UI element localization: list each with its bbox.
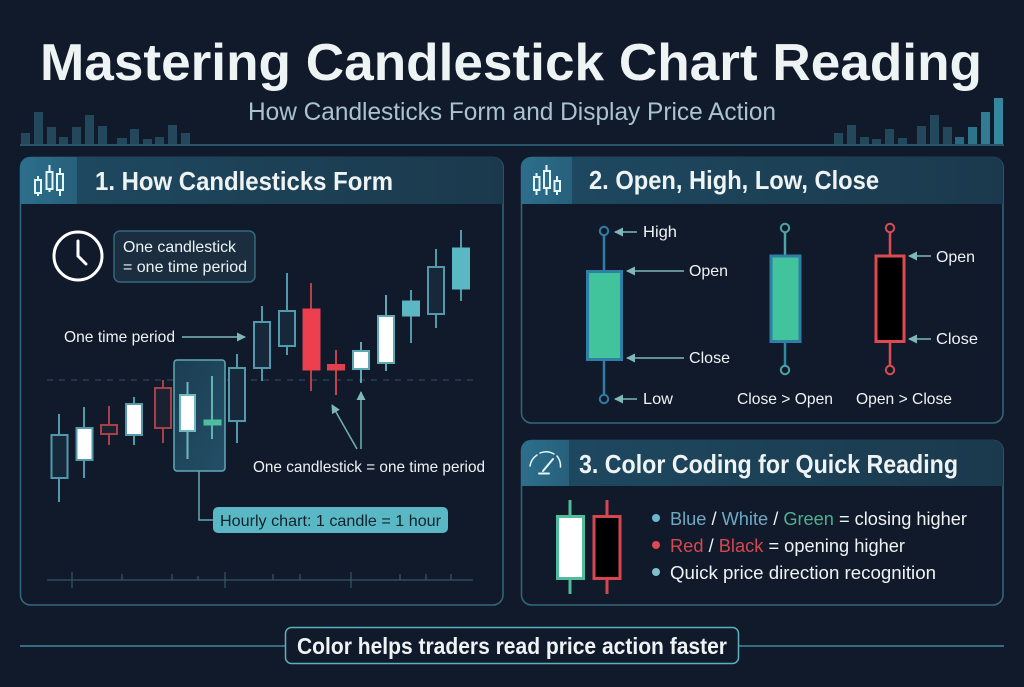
icon: speedometer bbox=[521, 440, 569, 486]
OHLC labels bbox=[615, 224, 730, 408]
candlestick chart bbox=[52, 230, 469, 502]
callout: one candlestick: One candlestick bbox=[123, 239, 237, 256]
OHLC labels: High bbox=[643, 224, 677, 241]
footer banner: Color helps traders read price action faster bbox=[297, 633, 727, 659]
OHLC labels: Open bbox=[689, 263, 728, 280]
decorative bars: left bbox=[21, 112, 190, 144]
candle: close above open: Close > Open bbox=[737, 391, 833, 408]
panel: color coding bbox=[521, 440, 1003, 605]
candle: annotated OHLC bbox=[588, 227, 622, 403]
panel 2 header bar bbox=[521, 157, 1003, 204]
icon: clock bbox=[54, 232, 102, 280]
legend list bbox=[652, 509, 967, 583]
panel: open high low close bbox=[521, 157, 1003, 423]
title: Mastering Candlestick Chart Reading bbox=[40, 34, 982, 92]
label: one time period: One time period bbox=[64, 329, 175, 346]
highlighted candle group bbox=[174, 360, 225, 471]
panel 3 heading: 3. Color Coding for Quick Reading bbox=[579, 449, 958, 479]
legend list: Blue / White / Green = closing higher bbox=[670, 509, 967, 529]
label: one candlestick arrows: One candlestick = one time period bbox=[253, 459, 485, 476]
panel 1 heading: 1. How Candlesticks Form bbox=[95, 166, 393, 196]
candle: open above close: Close bbox=[936, 331, 978, 348]
label: one candlestick arrows bbox=[253, 392, 485, 476]
footer banner bbox=[20, 628, 1004, 664]
callout: one candlestick: = one time period bbox=[123, 259, 247, 276]
time axis bbox=[47, 572, 473, 588]
candle pair bbox=[558, 500, 620, 594]
panel: how candlesticks form bbox=[20, 157, 503, 605]
OHLC labels: Low bbox=[643, 391, 673, 408]
callout: hourly chart: Hourly chart: 1 candle = 1 hour bbox=[220, 513, 442, 530]
panel 1 icon bbox=[20, 157, 77, 204]
candle: open above close bbox=[856, 224, 978, 408]
panel 2 heading: 2. Open, High, Low, Close bbox=[589, 165, 879, 195]
panel 3 header bar bbox=[521, 440, 1003, 486]
candle: close above open bbox=[737, 224, 833, 408]
subtitle: How Candlesticks Form and Display Price Action bbox=[248, 98, 776, 126]
legend list: Red / Black = opening higher bbox=[670, 536, 905, 556]
panel 1 header bar bbox=[20, 157, 503, 204]
legend list: Quick price direction recognition bbox=[670, 563, 936, 583]
callout: one candlestick bbox=[114, 231, 255, 282]
callout: hourly chart bbox=[199, 471, 448, 533]
panel 2 icon bbox=[521, 157, 572, 204]
decorative bars: right bbox=[834, 98, 1003, 144]
candle: open above close: Open bbox=[936, 249, 975, 266]
candle: open above close: Open > Close bbox=[856, 391, 952, 408]
OHLC labels: Close bbox=[689, 350, 730, 367]
